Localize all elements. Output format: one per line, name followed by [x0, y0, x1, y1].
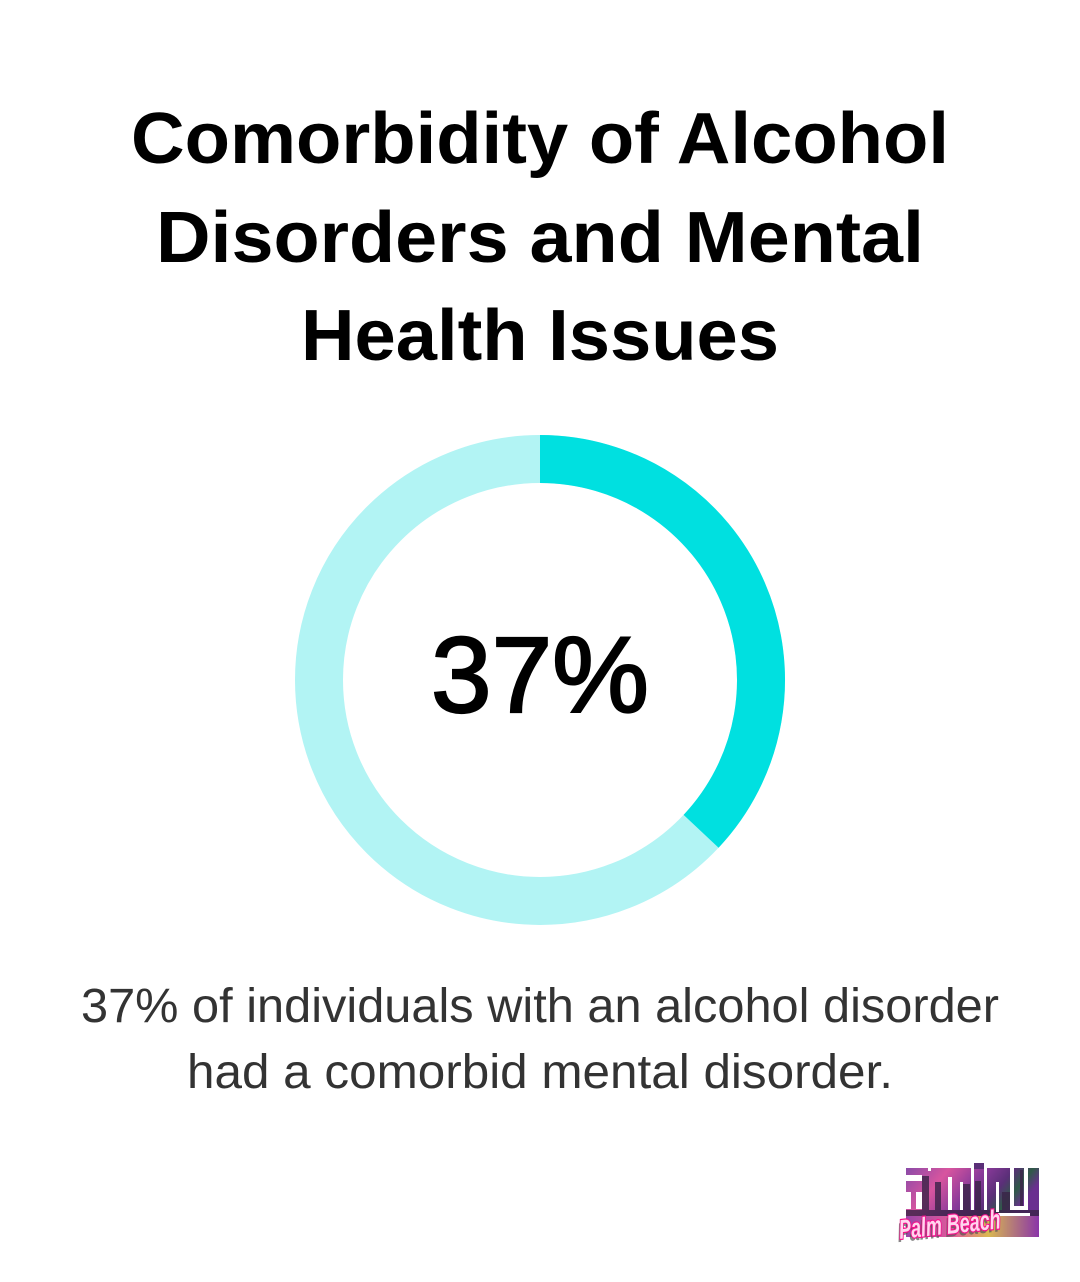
logo letter tops	[974, 1163, 984, 1169]
logo script text	[895, 1204, 1002, 1248]
title: Disorders and Mental	[156, 198, 924, 278]
logo script text: Palm Beach	[896, 1208, 1000, 1248]
title: Health Issues	[301, 296, 779, 376]
description text: had a comorbid mental disorder.	[187, 1046, 893, 1099]
logo skyline	[906, 1170, 1039, 1216]
donut segment: 37%	[540, 459, 761, 831]
logo image block	[906, 1168, 1039, 1218]
logo script text: Palm Beach	[897, 1204, 1002, 1245]
donut track	[319, 459, 761, 901]
description text: 37% of individuals with an alcohol disorder	[81, 980, 999, 1033]
donut value: 37%	[431, 614, 649, 735]
description text	[81, 980, 999, 1099]
logo: Amity Palm Beach	[895, 1163, 1039, 1248]
logo letter gaps	[906, 1163, 1030, 1216]
donut chart	[319, 459, 761, 901]
title	[131, 99, 949, 376]
title: Comorbidity of Alcohol	[131, 99, 949, 179]
